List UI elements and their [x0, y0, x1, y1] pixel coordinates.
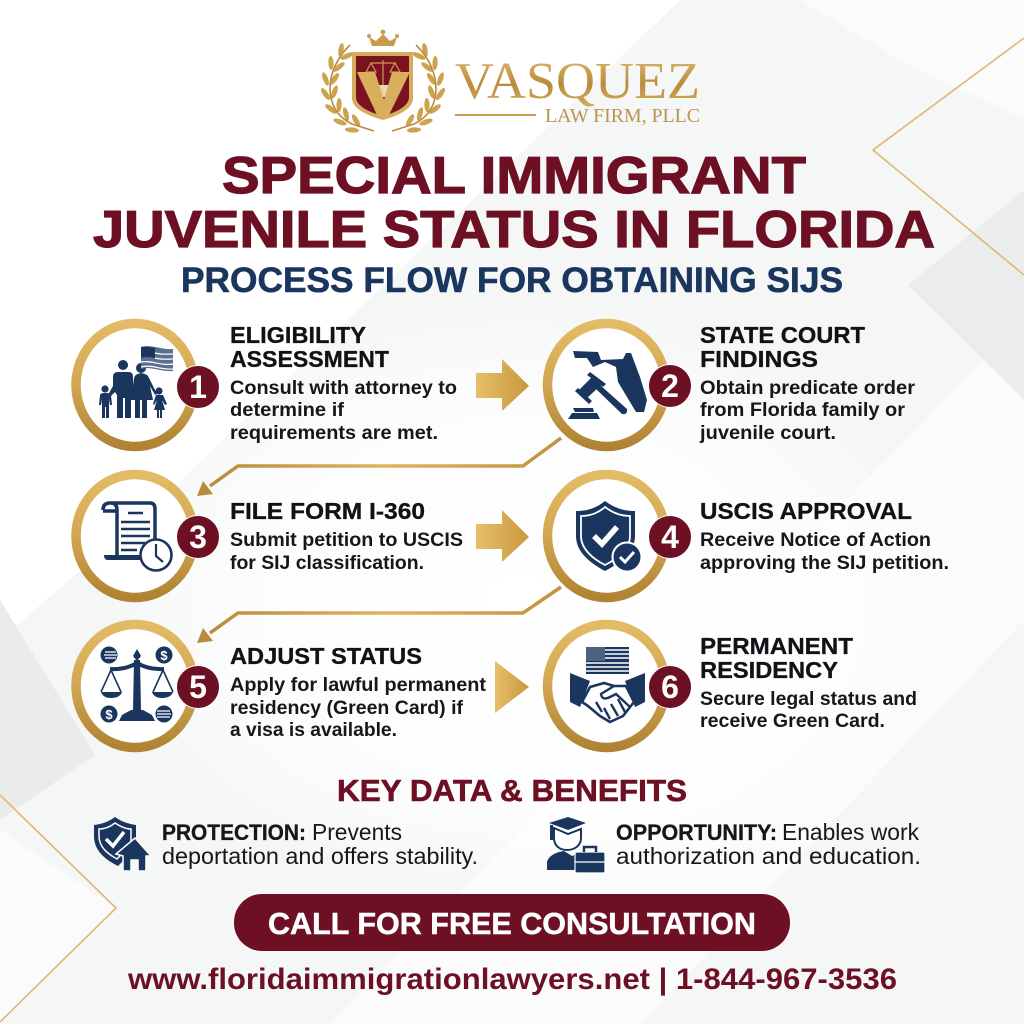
step 6 panel: permanent residency	[548, 624, 917, 748]
title: SPECIAL IMMIGRANT	[222, 147, 806, 205]
step 3 ring	[76, 474, 194, 598]
logo wordmark: VASQUEZ	[455, 53, 700, 110]
step 2 ring	[548, 324, 666, 446]
step 2 heading	[700, 322, 866, 372]
step 1 ring	[76, 324, 194, 446]
step 4 number badge	[648, 516, 692, 558]
icon: shield with check	[576, 501, 642, 572]
opportunity text: authorization and education.	[616, 843, 921, 869]
step 1 heading: ASSESSMENT	[230, 346, 390, 372]
icon: shield	[352, 52, 413, 120]
flow arrow: step 3 to step 4	[476, 510, 529, 562]
step 1 heading	[230, 322, 390, 372]
step 1 body: requirements are met.	[230, 422, 438, 444]
step 2 body: juvenile court.	[699, 422, 836, 444]
protection text: Prevents	[312, 819, 402, 845]
step 2 body	[699, 377, 915, 444]
step 3 body	[230, 529, 463, 574]
step 2 heading: FINDINGS	[700, 346, 818, 372]
connector arrow: step 2 to step 3	[197, 438, 561, 496]
step 2 number badge: 2	[661, 368, 679, 404]
step 3 body: Submit petition to USCIS	[230, 529, 463, 551]
step 4 body	[700, 529, 949, 574]
icon: laurel wreath	[319, 43, 447, 133]
step 2 heading: STATE COURT	[700, 322, 866, 348]
step 6 number badge	[648, 666, 692, 708]
step 2 number badge	[648, 364, 692, 408]
icon: graduate and briefcase	[547, 817, 605, 873]
step 4 body: Receive Notice of Action	[700, 529, 931, 551]
step 4 heading: USCIS APPROVAL	[700, 498, 912, 524]
step 6 body: Secure legal status and	[700, 688, 917, 710]
step 3 body: for SIJ classification.	[230, 552, 424, 574]
step 6 heading	[700, 633, 854, 683]
benefit: protection	[94, 817, 478, 871]
step 4 number badge: 4	[661, 519, 679, 555]
opportunity text	[616, 819, 921, 869]
icon: crown	[367, 30, 399, 46]
call to action button	[234, 894, 790, 951]
icon: scales and coins	[100, 646, 173, 722]
step 3 number badge: 3	[189, 519, 207, 555]
flow arrow: step 5 to step 6	[495, 661, 529, 713]
protection text: PROTECTION:	[162, 820, 306, 845]
step 5 body	[230, 674, 487, 741]
section heading: key data and benefits: KEY DATA & BENEFITS	[337, 773, 687, 808]
step 2 body: Obtain predicate order	[700, 377, 915, 399]
step 2 panel: state court findings	[548, 322, 915, 446]
connector arrow: step 4 to step 5	[197, 587, 561, 643]
step 3 heading: FILE FORM I-360	[230, 498, 425, 524]
call to action button: CALL FOR FREE CONSULTATION	[268, 906, 756, 941]
step 1 body: Consult with attorney to	[230, 377, 457, 399]
step 1 heading: ELIGIBILITY	[230, 322, 366, 348]
icon: flag and handshake	[570, 647, 645, 722]
protection text	[162, 819, 478, 869]
opportunity text: OPPORTUNITY:	[616, 820, 777, 845]
step 3 panel: file form I-360	[76, 474, 463, 598]
opportunity text: Enables work	[782, 819, 919, 845]
step 1 body	[230, 377, 457, 444]
benefit: opportunity	[547, 817, 921, 873]
protection text: deportation and offers stability.	[162, 843, 478, 869]
step 5 body: Apply for lawful permanent	[230, 674, 487, 696]
step 1 body: determine if	[230, 399, 345, 421]
step 2 body: from Florida family or	[700, 399, 905, 421]
icon: shield and house	[94, 817, 151, 871]
step 6 body: receive Green Card.	[700, 710, 885, 732]
step 4 ring	[548, 474, 666, 598]
logo subtitle: LAW FIRM, PLLC	[545, 105, 700, 127]
flow arrow: step 1 to step 2	[476, 359, 529, 411]
step 6 body	[700, 688, 917, 732]
title	[93, 147, 935, 259]
icon: scales and coins: $	[105, 707, 113, 722]
step 6 heading: PERMANENT	[700, 633, 854, 659]
step 5 body: residency (Green Card) if	[230, 697, 463, 719]
step 1 number badge	[176, 366, 220, 408]
contact line: www.floridaimmigrationlawyers.net | 1-844-967-3536	[127, 963, 897, 996]
subtitle: PROCESS FLOW FOR OBTAINING SIJS	[181, 261, 843, 300]
logo: Vasquez Law Firm	[319, 30, 700, 133]
icon: Florida map and gavel	[568, 351, 647, 419]
step 5 number badge: 5	[189, 669, 207, 705]
step 1 panel: eligibility assessment	[76, 322, 457, 446]
step 5 body: a visa is available.	[230, 719, 397, 741]
title: JUVENILE STATUS IN FLORIDA	[93, 201, 935, 259]
step 6 ring	[548, 624, 666, 748]
icon: document and clock	[103, 503, 172, 570]
icon: family and flag	[99, 346, 173, 418]
step 6 heading: RESIDENCY	[700, 657, 838, 683]
step 5 panel: adjust status	[76, 624, 487, 748]
step 5 ring	[76, 624, 194, 748]
step 5 heading: ADJUST STATUS	[230, 643, 422, 669]
step 5 number badge	[176, 666, 220, 708]
step 4 body: approving the SIJ petition.	[700, 552, 949, 574]
step 6 number badge: 6	[661, 669, 679, 705]
icon: scales and coins: $	[160, 648, 168, 663]
step 1 number badge: 1	[189, 369, 207, 405]
step 3 number badge	[176, 516, 220, 558]
step 4 panel: USCIS approval	[548, 474, 949, 598]
logo divider	[455, 114, 536, 116]
